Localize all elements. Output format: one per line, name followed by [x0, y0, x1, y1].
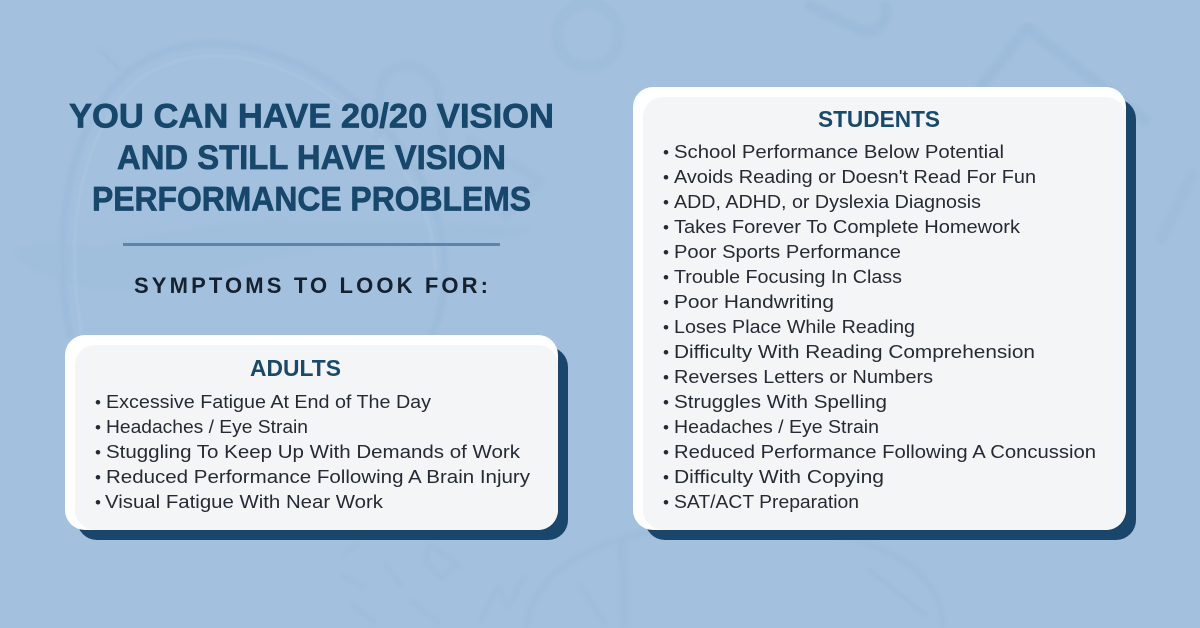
students symptom list — [663, 141, 1096, 512]
students symptom list: School Performance Below Potential — [674, 141, 1004, 162]
students symptom list: ADD, ADHD, or Dyslexia Diagnosis — [674, 191, 981, 212]
students symptom list: • — [663, 318, 669, 337]
students symptom list: • — [663, 468, 669, 487]
students symptom list: • — [663, 193, 669, 212]
students symptom list: Avoids Reading or Doesn't Read For Fun — [674, 166, 1036, 187]
students symptom list: Loses Place While Reading — [674, 316, 915, 337]
adults symptom list: • — [95, 493, 101, 512]
students symptom list: • — [663, 293, 669, 312]
adults symptom list: Headaches / Eye Strain — [106, 416, 308, 437]
students symptom list: • — [663, 443, 669, 462]
students symptom list: Headaches / Eye Strain — [674, 416, 879, 437]
adults card inner — [75, 345, 558, 530]
students symptom list: • — [663, 343, 669, 362]
students symptom list: • — [663, 493, 669, 512]
students symptom list: • — [663, 168, 669, 187]
adults symptom list: Stuggling To Keep Up With Demands of Work — [106, 441, 521, 462]
adults symptom list: • — [95, 418, 101, 437]
students symptom list: SAT/ACT Preparation — [674, 491, 859, 512]
title — [69, 98, 554, 218]
title: YOU CAN HAVE 20/20 VISION — [69, 98, 554, 136]
subheading: symptoms to look for: SYMPTOMS TO LOOK FOR: — [134, 273, 488, 298]
students symptom list: • — [663, 393, 669, 412]
title: PERFORMANCE PROBLEMS — [92, 180, 531, 218]
students symptom list: • — [663, 418, 669, 437]
students symptom list: Reduced Performance Following A Concussion — [674, 441, 1096, 462]
students symptom list: • — [663, 143, 669, 162]
panel: adults — [65, 335, 568, 540]
adults symptom list: Reduced Performance Following A Brain Injury — [106, 466, 531, 487]
students symptom list: Poor Handwriting — [674, 291, 834, 312]
adults symptom list: • — [95, 468, 101, 487]
students symptom list: • — [663, 243, 669, 262]
students symptom list: • — [663, 218, 669, 237]
adults heading: ADULTS — [250, 355, 341, 381]
students symptom list: Reverses Letters or Numbers — [674, 366, 933, 387]
students card border — [633, 87, 1126, 530]
adults card border — [65, 335, 558, 530]
students symptom list: • — [663, 368, 669, 387]
students card inner — [643, 97, 1126, 530]
students symptom list: Trouble Focusing In Class — [674, 266, 902, 287]
adults symptom list: • — [95, 443, 101, 462]
students heading: STUDENTS — [818, 106, 940, 132]
adults symptom list: Excessive Fatigue At End of The Day — [106, 391, 432, 412]
students symptom list: Difficulty With Copying — [674, 466, 884, 487]
students symptom list: Takes Forever To Complete Homework — [674, 216, 1021, 237]
students symptom list: Difficulty With Reading Comprehension — [674, 341, 1035, 362]
students symptom list: Struggles With Spelling — [674, 391, 887, 412]
students symptom list: • — [663, 268, 669, 287]
divider line — [123, 243, 500, 246]
adults symptom list: Visual Fatigue With Near Work — [105, 491, 384, 512]
adults card shadow — [77, 347, 568, 540]
adults symptom list: • — [95, 393, 101, 412]
title: AND STILL HAVE VISION — [117, 139, 506, 177]
panel: students — [633, 87, 1136, 540]
students card shadow — [645, 99, 1136, 540]
adults symptom list — [95, 391, 531, 512]
students symptom list: Poor Sports Performance — [674, 241, 901, 262]
